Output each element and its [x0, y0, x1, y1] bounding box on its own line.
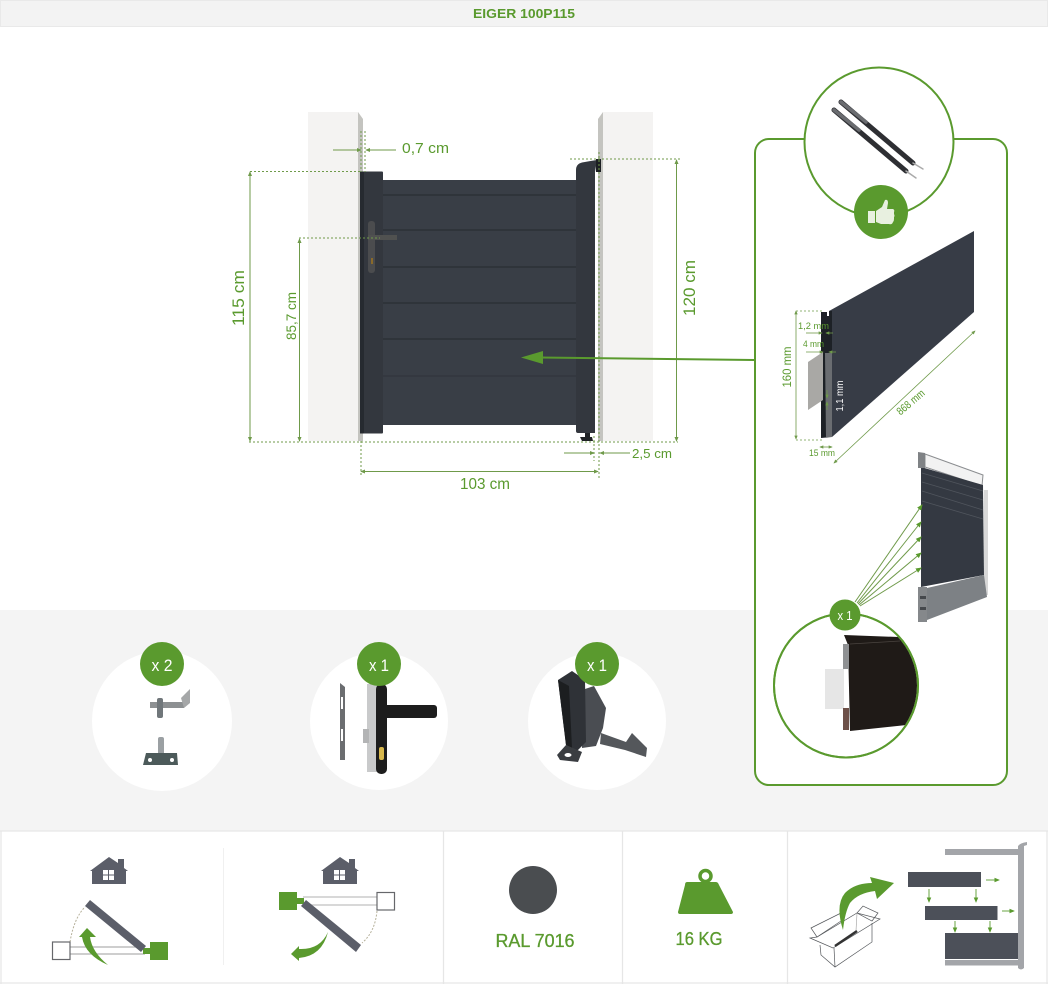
badge: x 1	[575, 642, 619, 686]
gate	[360, 159, 601, 441]
slat profile with dimensions	[780, 231, 975, 463]
circle: assembly rods	[804, 68, 954, 216]
panel: slat details	[755, 139, 1007, 785]
icon: box	[810, 906, 880, 967]
icon: thumbs up badge	[854, 185, 908, 239]
label: 15 mm: 15 mm	[809, 448, 835, 458]
dimensions: gate	[249, 131, 680, 478]
icon: inward opening	[52, 857, 168, 965]
label: 16 KG: 16 KG	[676, 929, 722, 949]
colour swatch	[509, 866, 557, 914]
label: 0,7 cm: 0,7 cm	[402, 140, 449, 157]
label: 1,2 mm: 1,2 mm	[798, 321, 829, 331]
accessory: lock and handle	[310, 642, 448, 790]
icon: packaging and assembly	[810, 842, 1027, 970]
title bar	[0, 0, 1048, 26]
badge: x 1	[357, 642, 401, 686]
circle: bottom profile	[773, 614, 919, 758]
bottom strip	[0, 831, 1048, 984]
title bar: EIGER 100P115	[473, 6, 575, 21]
left pillar	[308, 112, 363, 441]
icon: house	[321, 857, 359, 884]
label: 1,1 mm: 1,1 mm	[835, 380, 846, 412]
label: 115 cm: 115 cm	[229, 270, 248, 326]
arrow: gate to slat detail	[521, 351, 754, 364]
icon: outward opening	[279, 857, 394, 961]
label: 85,7 cm: 85,7 cm	[283, 292, 299, 340]
label: 4 mm: 4 mm	[803, 339, 824, 349]
icon: weight	[678, 870, 733, 914]
label: 120 cm: 120 cm	[680, 260, 699, 316]
label: 2,5 cm: 2,5 cm	[632, 446, 672, 461]
accessory: hinges	[92, 642, 232, 791]
badge: x 1 profile: x 1	[838, 608, 852, 623]
badge: x 1: x 1	[369, 656, 389, 675]
badge: x 2: x 2	[152, 656, 172, 675]
badge: x 1 profile	[830, 600, 860, 630]
right pillar	[598, 112, 653, 441]
label: 868 mm: 868 mm	[895, 387, 928, 418]
label: 103 cm: 103 cm	[460, 476, 510, 493]
grey accessories band	[0, 610, 1048, 831]
assembled gate section	[918, 452, 988, 622]
assembly slats	[908, 842, 1027, 970]
door handle	[368, 221, 397, 273]
icon: house	[90, 857, 128, 884]
label: RAL 7016: RAL 7016	[496, 931, 574, 951]
accessory: gate stop	[528, 642, 666, 790]
badge: x 1: x 1	[587, 656, 607, 675]
badge: x 2	[140, 642, 184, 686]
arrows: slat locations	[855, 505, 922, 606]
label: 160 mm: 160 mm	[780, 346, 794, 388]
